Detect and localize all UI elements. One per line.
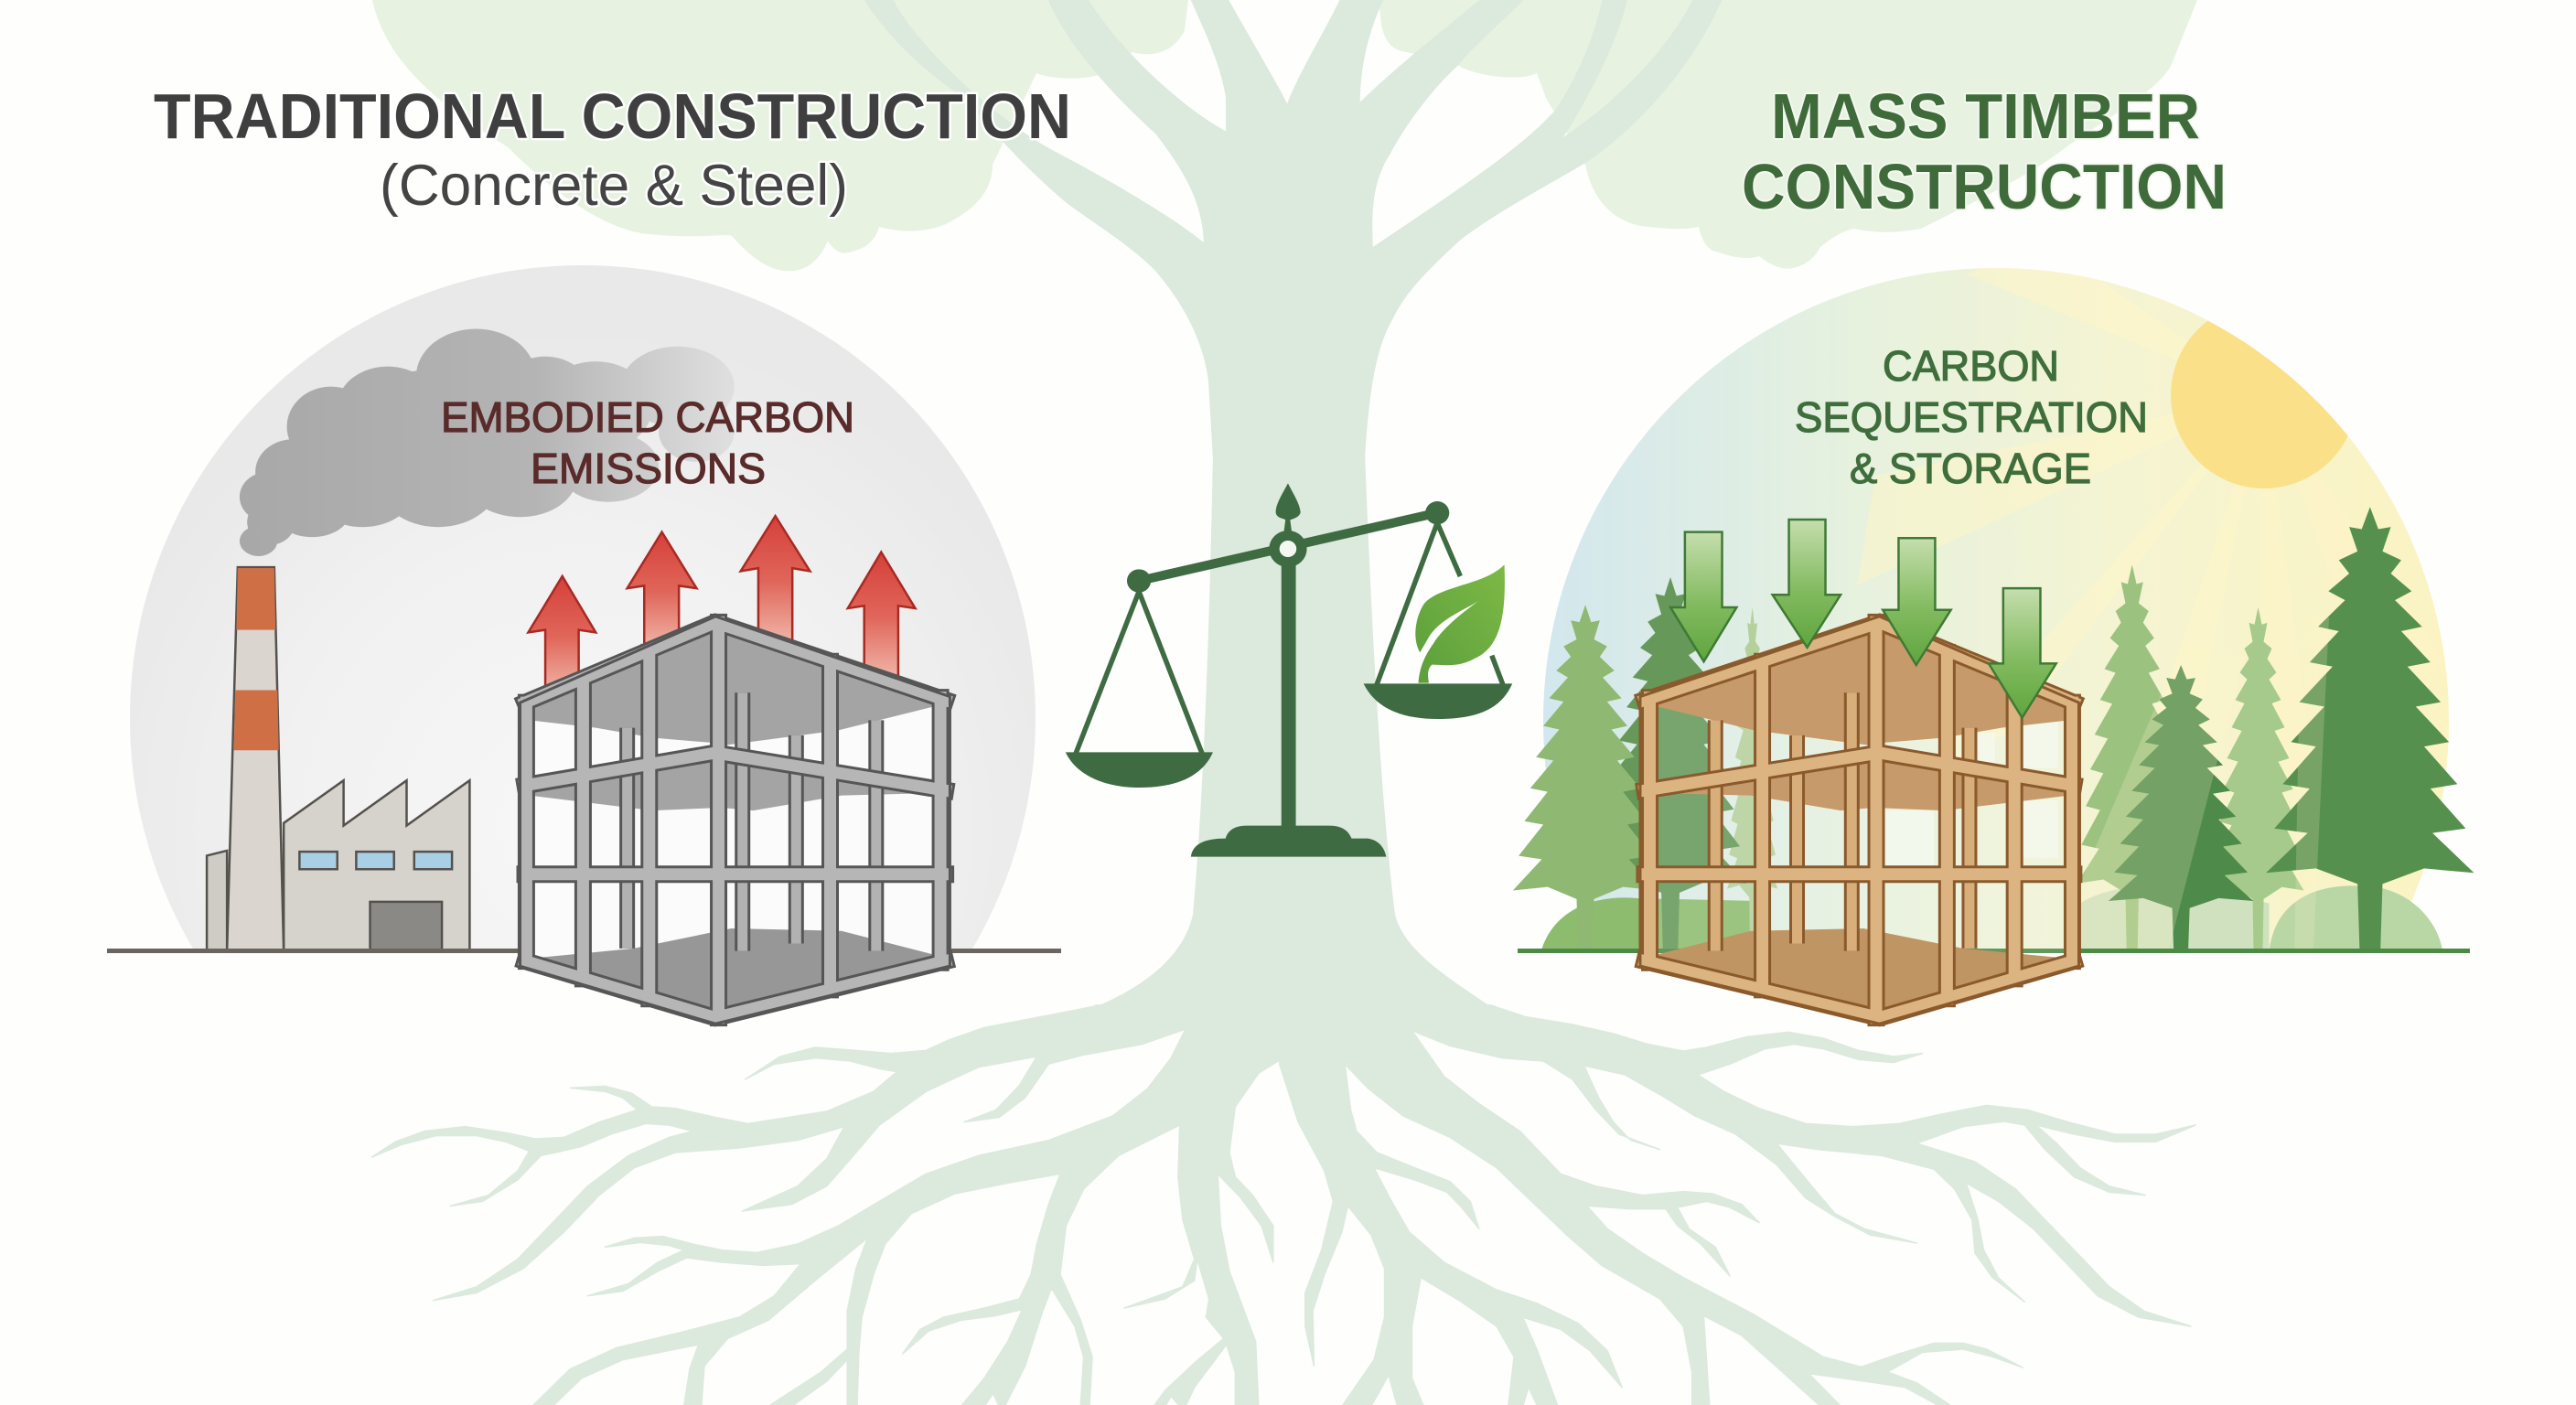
label: carbon sequestration and storage: CARBON	[1883, 342, 2059, 390]
factory with chimney	[207, 567, 469, 951]
heading: traditional construction: (Concrete & Steel)	[380, 154, 848, 218]
sky backdrop circle	[1537, 265, 2452, 951]
panel: traditional construction scene	[107, 265, 1061, 1026]
heading: traditional construction	[154, 80, 1071, 218]
heading: mass timber construction	[1742, 80, 2227, 222]
label: carbon sequestration and storage: & STORAGE	[1850, 445, 2091, 492]
tree canopy: left foliage	[372, 0, 1188, 271]
icon: balance scale with leaf	[1066, 483, 1512, 857]
scale beam and pivot	[1127, 483, 1449, 593]
timber building frame	[1640, 617, 2078, 1024]
label: carbon sequestration and storage: SEQUESTRATION	[1795, 393, 2148, 441]
green sequestration arrows	[1670, 520, 2056, 718]
label: embodied carbon emissions: EMBODIED CARBON	[441, 393, 854, 441]
sun rays	[1857, 268, 2100, 757]
tree trunk and branches	[864, 0, 1722, 460]
ground line	[1518, 949, 2470, 953]
label: embodied carbon emissions	[441, 393, 854, 492]
heading: mass timber construction: MASS TIMBER	[1771, 80, 2200, 152]
roots: right half	[1280, 1005, 2195, 1405]
heading: traditional construction: TRADITIONAL CONSTRUCTION	[154, 80, 1071, 152]
heading: mass timber construction: CONSTRUCTION	[1742, 151, 2227, 222]
tree lower trunk	[1093, 453, 1493, 1008]
label: carbon sequestration and storage	[1795, 342, 2148, 492]
concrete building frame	[521, 617, 950, 1024]
scale stand	[1191, 561, 1386, 857]
forest of fir trees	[1513, 507, 2474, 951]
label: embodied carbon emissions: EMISSIONS	[531, 445, 766, 492]
roots: left half	[371, 1005, 1283, 1405]
green leaf	[1415, 564, 1505, 683]
smoke cloud	[240, 329, 735, 556]
right pan	[1364, 523, 1512, 719]
sun	[2171, 320, 2348, 488]
tree roots	[371, 1005, 2195, 1405]
ground line	[107, 949, 1061, 953]
left pan	[1066, 592, 1213, 788]
panel: mass timber construction scene	[1513, 238, 2474, 1024]
tree canopy: right foliage	[1379, 0, 2197, 269]
grey backdrop circle	[130, 265, 1036, 949]
red emission arrows	[528, 516, 916, 698]
